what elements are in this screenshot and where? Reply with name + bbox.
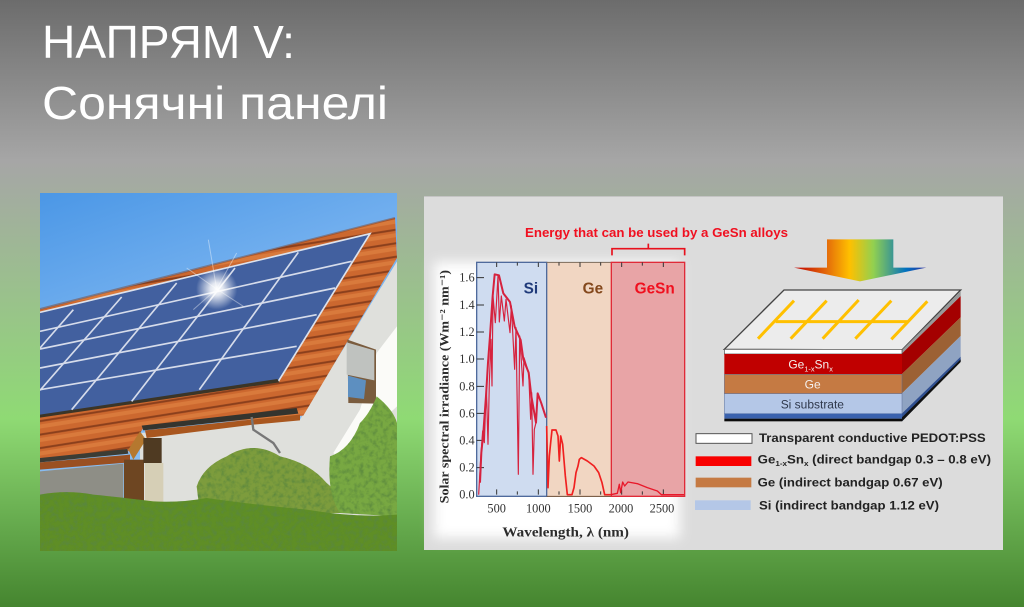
band labels: GeSn: [635, 280, 675, 297]
legend: Si (indirect bandgap 1.12 eV): [759, 498, 939, 512]
legend: Ge (indirect bandgap 0.67 eV): [758, 475, 943, 489]
layer labels: Ge: [788, 358, 804, 372]
y tick labels: 0.6: [459, 406, 475, 420]
y tick labels: 0.2: [459, 461, 475, 475]
solar panels: [40, 234, 370, 418]
x tick labels: 1500: [568, 502, 592, 516]
dormer window: [347, 340, 376, 404]
photo: house with rooftop solar panels: [40, 193, 397, 551]
spectrum arrow: [794, 239, 926, 281]
legend: 1-x: [775, 459, 788, 468]
legend: x: [804, 459, 810, 468]
y tick labels: 1.2: [459, 325, 475, 339]
x tick labels: 2500: [650, 502, 674, 516]
y tick labels: 1.0: [459, 352, 475, 366]
house wall: [140, 262, 397, 516]
annotation: energy usable by GeSn: Energy that can be used by a GeSn alloys: [525, 226, 788, 240]
spectrum curve: Ge: [547, 426, 611, 495]
x axis title: Wavelength, λ (nm): [502, 524, 629, 539]
panel: GeSn solar cell figure: [424, 196, 1003, 550]
legend: Transparent conductive PEDOT:PSS: [759, 431, 986, 445]
layer labels: x: [829, 365, 833, 374]
y tick labels: [459, 271, 475, 502]
y tick labels: 0.8: [459, 379, 475, 393]
cell stack: Si substrate: [781, 397, 844, 411]
cell stack: [724, 290, 961, 421]
x tick labels: 2000: [609, 502, 633, 516]
conifer: [329, 396, 397, 516]
legend: Sn: [787, 452, 804, 466]
ground floor shutters and door frame: [40, 438, 163, 503]
layer labels: 1-x: [804, 365, 815, 374]
band labels: Ge: [583, 280, 603, 297]
solar cell diagram and legend: [695, 239, 991, 512]
spectrum curve: GeSn: [611, 482, 684, 495]
layer labels: Sn: [815, 358, 829, 372]
cell stack: Ge: [805, 377, 821, 391]
y tick labels: 1.4: [459, 298, 475, 312]
sun glare: [187, 240, 243, 310]
front layers: [724, 349, 902, 354]
side faces: [902, 296, 961, 374]
axis ticks: [477, 262, 663, 495]
bracket: [612, 244, 685, 255]
x tick labels: 1000: [526, 502, 551, 516]
chart backdrop: [434, 262, 680, 538]
x tick labels: [487, 502, 674, 516]
title: НАПРЯМ V:: [42, 16, 295, 68]
hedge: [40, 492, 397, 551]
legend: Ge: [758, 452, 774, 466]
top electrode surface: [724, 290, 961, 350]
legend: (direct bandgap 0.3 – 0.8 eV): [808, 452, 991, 466]
chart: solar spectral irradiance: [437, 244, 685, 539]
x tick labels: 500: [487, 502, 506, 516]
y tick labels: 0.0: [459, 488, 475, 502]
title: Сонячні панелі: [42, 77, 388, 129]
roof ridge: [40, 218, 395, 309]
band labels: Si: [524, 280, 538, 297]
spectral bands: [477, 262, 685, 496]
y tick labels: 1.6: [459, 271, 475, 285]
y axis title: Solar spectral irradiance (Wm⁻² nm⁻¹): [437, 270, 451, 503]
shrub: [197, 448, 341, 513]
legend: [695, 431, 991, 512]
spectrum curve: Si: [479, 274, 546, 495]
y tick labels: 0.4: [459, 433, 475, 447]
band labels: [524, 280, 675, 297]
tiled roof: [40, 218, 397, 459]
roof gutter and eaves: [40, 408, 300, 470]
title: [42, 16, 388, 129]
finger contacts: [758, 300, 927, 339]
